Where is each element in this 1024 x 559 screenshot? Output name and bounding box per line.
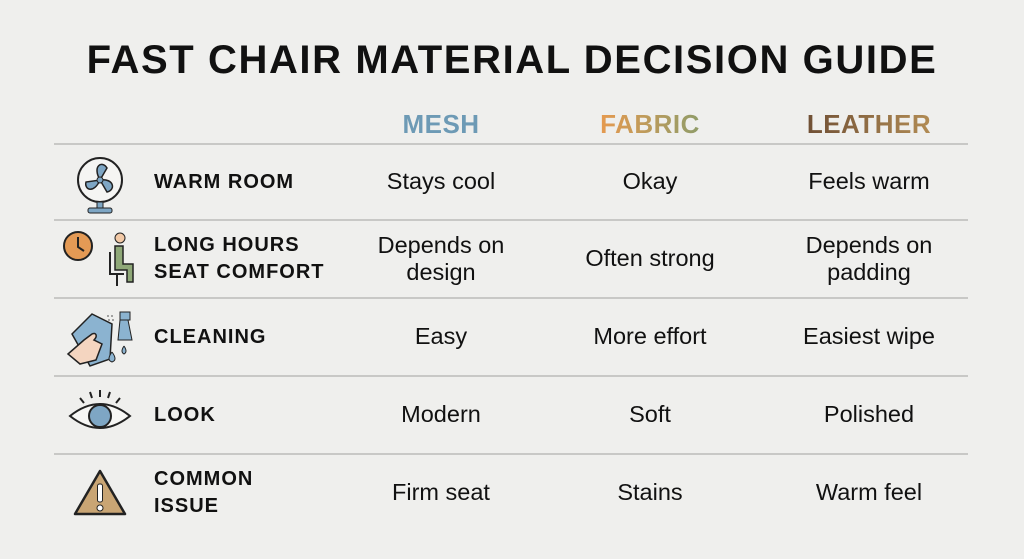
text: Firm seat — [392, 479, 490, 505]
title: FAST CHAIR MATERIAL DECISION GUIDE — [87, 38, 937, 82]
text: Easiest wipe — [803, 323, 935, 349]
text: Warm feel — [816, 479, 922, 505]
icon: warning — [74, 470, 126, 516]
label: common issue — [154, 468, 253, 517]
text: Polished — [824, 401, 914, 427]
label: long hours — [154, 234, 325, 283]
header: fabric: FABRIC — [600, 109, 700, 139]
text: Stains — [617, 479, 683, 505]
icon: cleaning — [66, 312, 133, 367]
icon: eye — [68, 390, 132, 429]
icon: clock and seated person — [63, 231, 134, 286]
label: common issue: COMMON — [154, 468, 253, 490]
text: Often strong — [585, 245, 715, 271]
text: Modern — [401, 401, 481, 427]
header: mesh: MESH — [402, 109, 480, 139]
text: Feels warm — [808, 168, 930, 194]
label: cleaning: CLEANING — [154, 326, 266, 348]
text: Soft — [629, 401, 671, 427]
icon: fan — [77, 157, 123, 214]
label: long hours: SEAT COMFORT — [154, 261, 325, 283]
text: Easy — [415, 323, 467, 349]
text: design — [406, 259, 476, 285]
text: padding — [827, 259, 911, 285]
label: warm room: WARM ROOM — [154, 171, 294, 193]
label: common issue: ISSUE — [154, 495, 219, 517]
label: long hours: LONG HOURS — [154, 234, 300, 256]
text: Depends on — [806, 232, 932, 258]
text: Depends on — [378, 232, 504, 258]
header: leather: LEATHER — [807, 109, 931, 139]
label: look: LOOK — [154, 404, 216, 426]
text: Stays cool — [387, 168, 495, 194]
text: Okay — [623, 168, 677, 194]
text: More effort — [593, 323, 707, 349]
